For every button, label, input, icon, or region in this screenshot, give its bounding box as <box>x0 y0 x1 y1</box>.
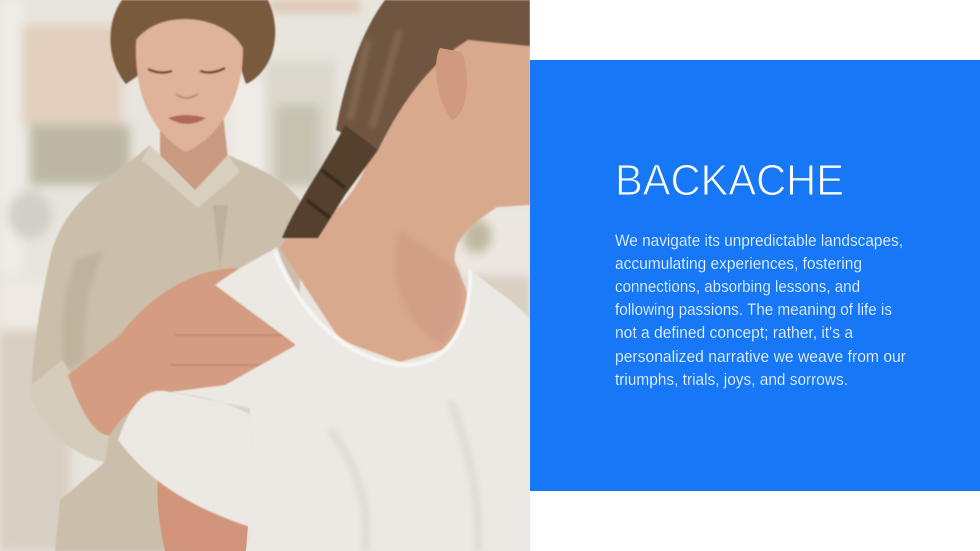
body text block: We navigate its unpredictable landscapes, <box>615 231 903 250</box>
body text block: connections, absorbing lessons, and <box>615 277 860 296</box>
patient white t-shirt <box>118 247 530 551</box>
body text block: following passions. The meaning of life is <box>615 300 892 319</box>
photo: therapist examining a woman's shoulder <box>0 0 530 551</box>
therapist neck and face <box>136 19 243 195</box>
body text block <box>615 231 906 389</box>
heading: BACKACHE <box>615 156 844 205</box>
body text block: triumphs, trials, joys, and sorrows. <box>615 370 848 389</box>
patient neck and back <box>280 40 530 362</box>
therapist forearm and hand <box>68 268 296 435</box>
patient ear <box>436 48 467 120</box>
therapist shirt <box>32 145 300 551</box>
body text block: personalized narrative we weave from our <box>615 347 906 366</box>
panel: blue text panel <box>530 60 980 491</box>
body text block: not a defined concept; rather, it's a <box>615 323 853 342</box>
patient upper arm <box>158 480 248 551</box>
patient hair and braid <box>282 0 530 238</box>
therapist hair <box>110 0 275 84</box>
body text block: accumulating experiences, fostering <box>615 254 862 273</box>
